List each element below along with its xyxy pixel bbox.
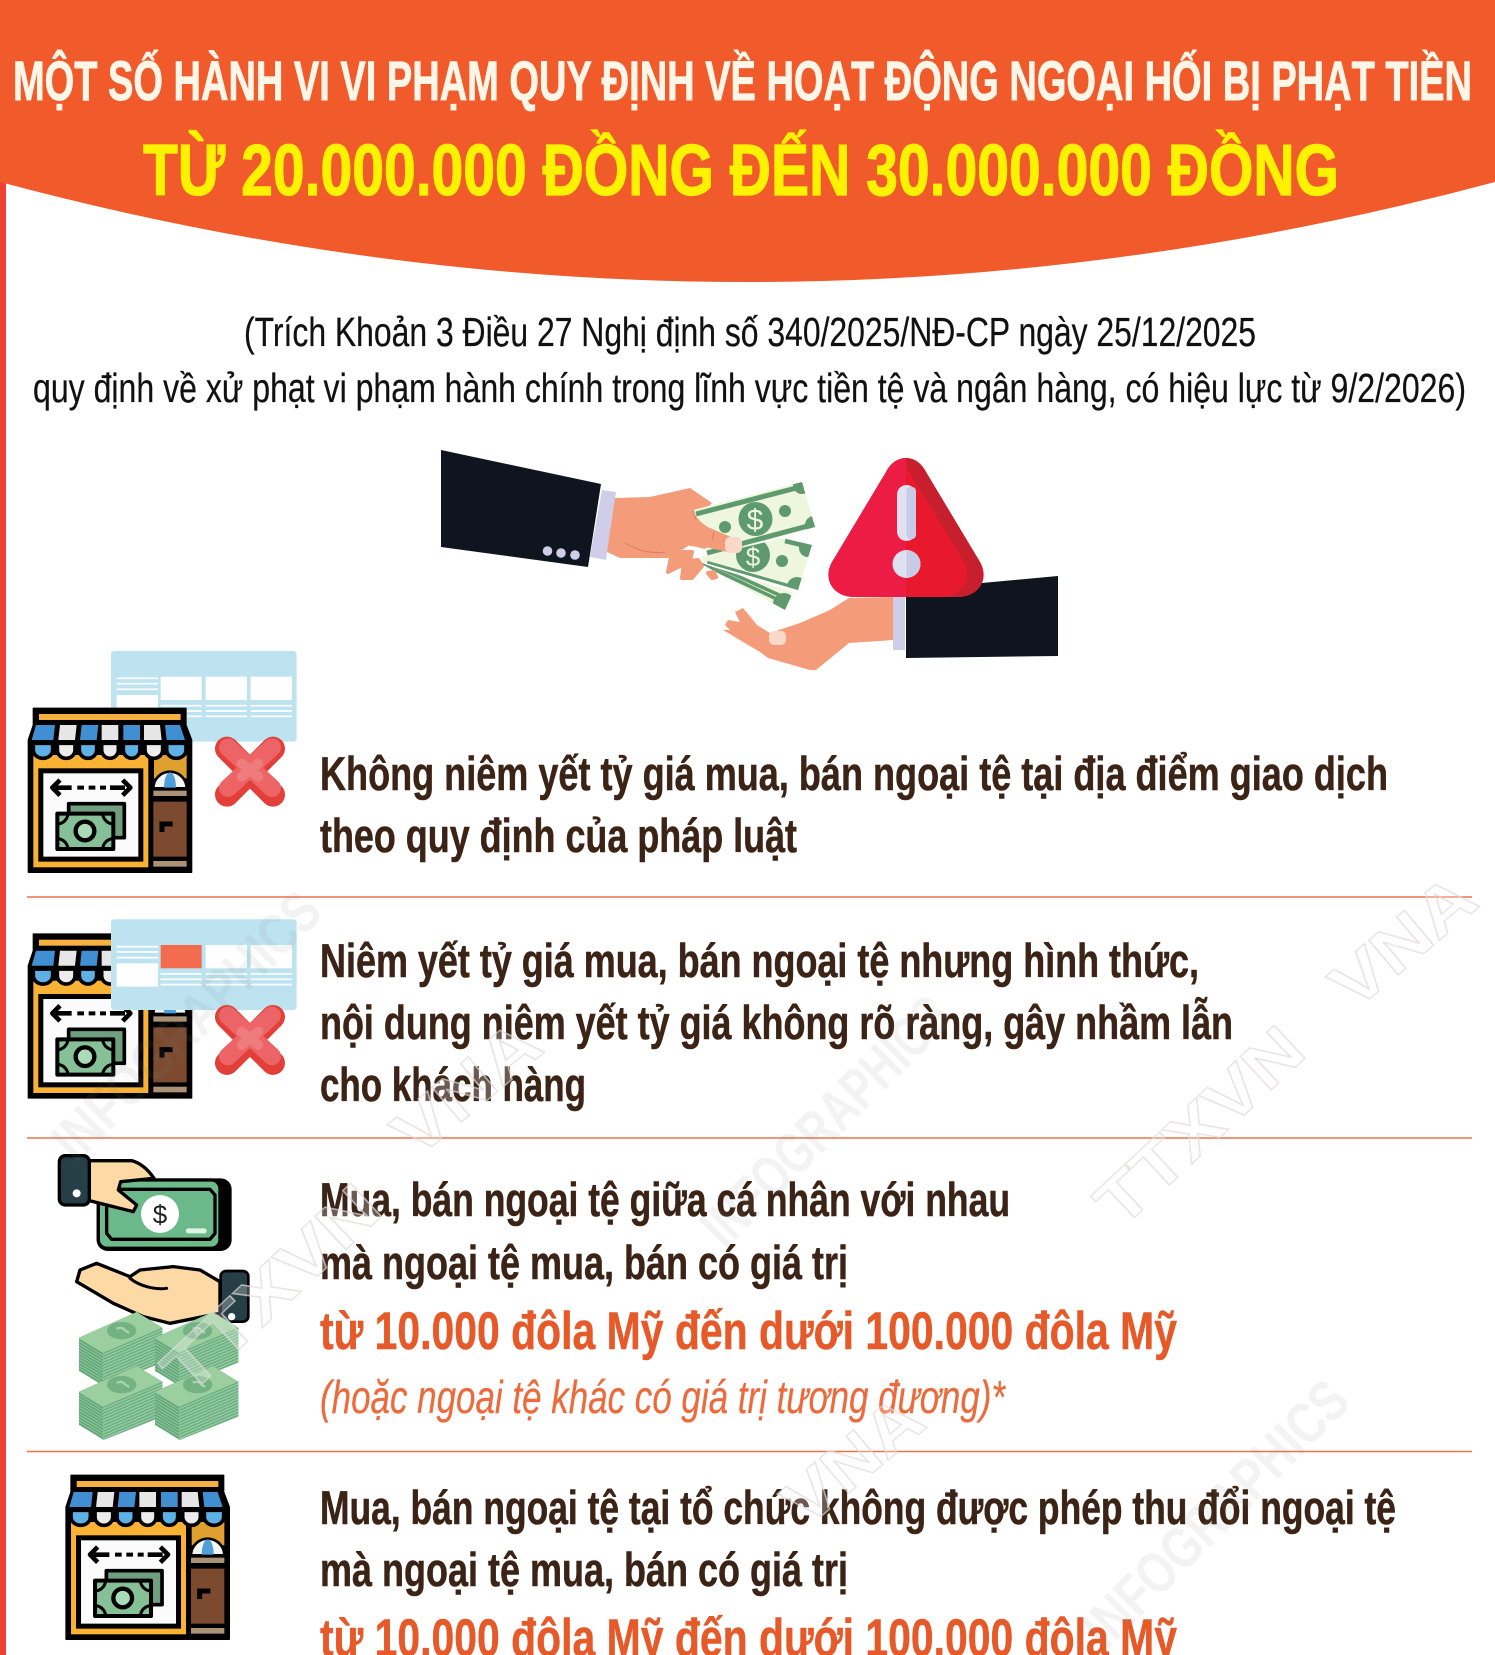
watermark: TTXVN [1080,1011,1319,1240]
text: item 2: cho khách hàng [320,1058,586,1111]
icon: cross 1 [227,747,273,795]
watermark: INFOGRAPHICS [39,878,334,1173]
illustration: hands exchanging money with warning sign: $ [747,504,764,537]
front note [693,482,815,557]
text: item 4: mà ngoại tệ mua, bán có giá trị [320,1543,848,1596]
left border stripe [0,170,6,1655]
left hand [607,488,712,558]
back notes: $ [746,542,761,572]
text: item 3: Mua, bán ngoại tệ giữa cá nhân với nhau [320,1173,1010,1226]
right sleeve [906,576,1058,658]
text: item 2: Niêm yết tỷ giá mua, bán ngoại tệ nhưng hình thức, [320,934,1199,987]
text: item 3 [320,1173,1177,1423]
icon: store 1 [28,708,192,872]
text: item 1 [320,747,1388,862]
text: item 2 [320,934,1233,1111]
watermark [39,859,1490,1655]
panel 1: rate board [111,651,297,742]
thumb [690,505,742,553]
back notes [692,538,812,610]
icon: hands passing a banknote above money stacks [59,1156,248,1440]
header banner [0,0,1495,282]
illustration: hands exchanging money with warning sign [441,450,1058,670]
watermark: VNA [1315,859,1490,1023]
text: item 3: (hoặc ngoại tệ khác có giá trị tương đương)* [320,1371,1007,1423]
text: item 3: từ 10.000 đôla Mỹ đến dưới 100.000 đôla Mỹ [320,1302,1177,1361]
panel 2: rate board with error cell [111,919,297,1010]
text: item 3: mà ngoại tệ mua, bán có giá trị [320,1236,848,1289]
subtitle [33,309,1466,411]
text: item 4 [320,1481,1396,1655]
watermark: TTXVN [147,1169,395,1407]
text: item 1: theo quy định của pháp luật [320,809,797,862]
watermark: VNA [767,1380,938,1540]
icon: store 2 [28,934,192,1098]
lower hand [723,597,893,670]
icon: hands passing a banknote above money stacks: $ [153,1199,168,1229]
icon: store 4 with money stacks [66,1475,238,1655]
text: item 2: nội dung niêm yết tỷ giá không rõ ràng, gây nhầm lẫn [320,996,1233,1049]
watermark: INFOGRAPHICS [1069,1367,1362,1655]
icon: cross 2 [227,1016,273,1063]
watermark: VNA [377,1005,555,1171]
warning triangle [828,458,984,597]
watermark: INFOGRAPHICS [688,983,964,1259]
fingers [668,552,716,578]
